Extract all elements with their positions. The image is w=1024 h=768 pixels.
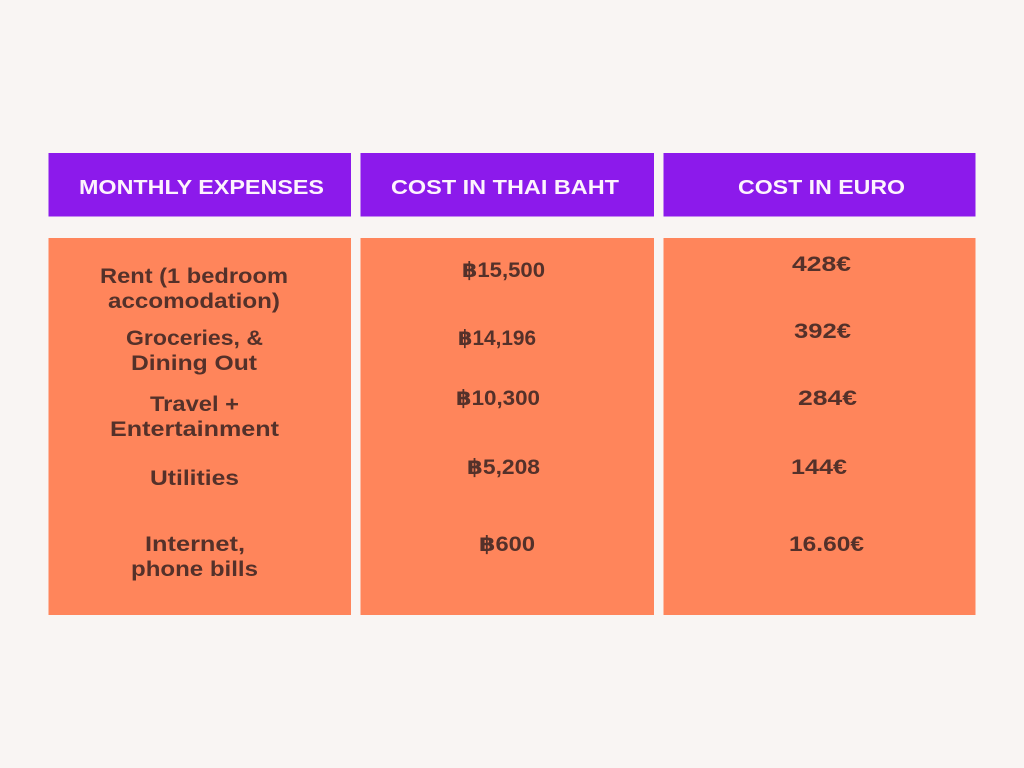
row label: groceries: Dining Out xyxy=(131,352,257,375)
header: cost in thai baht xyxy=(360,153,654,216)
row label: travel: Entertainment xyxy=(110,418,279,441)
value: utilities euro: 144€ xyxy=(791,456,847,479)
row label: rent: accomodation) xyxy=(108,290,280,313)
row label: rent xyxy=(100,265,288,313)
header: cost in euro xyxy=(664,153,976,216)
header: cost in thai baht: COST IN THAI BAHT xyxy=(391,177,619,199)
value: groceries baht: ฿14,196 xyxy=(458,327,536,350)
value: groceries euro: 392€ xyxy=(794,320,851,343)
row label: travel xyxy=(110,393,279,441)
value: travel euro: 284€ xyxy=(798,387,857,410)
header: monthly expenses: MONTHLY EXPENSES xyxy=(79,177,324,199)
value: travel baht: ฿10,300 xyxy=(456,387,540,410)
value: utilities baht: ฿5,208 xyxy=(467,456,540,479)
row label: groceries: Groceries, & xyxy=(126,327,263,350)
panel: expense categories xyxy=(48,238,351,615)
row label: rent: Rent (1 bedroom xyxy=(100,265,288,288)
panel: cost in baht values xyxy=(360,238,654,615)
row label: utilities: Utilities xyxy=(150,467,239,490)
row label: travel: Travel + xyxy=(150,393,239,416)
row label: internet: Internet, xyxy=(145,533,245,556)
value: rent baht: ฿15,500 xyxy=(462,259,545,282)
value: rent euro: 428€ xyxy=(792,253,851,276)
row label: groceries xyxy=(126,327,263,375)
panel: cost in euro values xyxy=(664,238,976,615)
row label: internet: phone bills xyxy=(131,558,258,581)
header: cost in euro: COST IN EURO xyxy=(738,177,905,199)
header: monthly expenses xyxy=(48,153,351,216)
value: internet euro: 16.60€ xyxy=(789,533,864,556)
row label: internet xyxy=(131,533,258,581)
value: internet baht: ฿600 xyxy=(479,533,535,556)
